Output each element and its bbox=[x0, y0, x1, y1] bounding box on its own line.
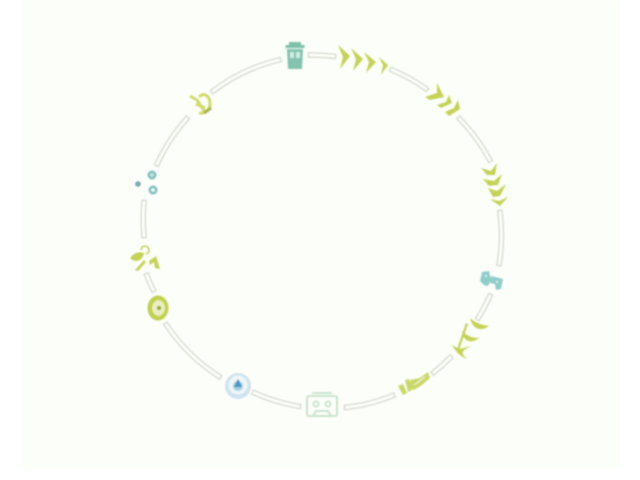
icon: chevrons down bbox=[481, 163, 508, 206]
icon: chevrons diagonal bbox=[425, 83, 460, 116]
icon: microscope bbox=[190, 95, 211, 113]
icon: teal machine bbox=[480, 271, 503, 290]
icon: leaf sprig bbox=[452, 318, 489, 359]
ring segments bbox=[143, 55, 501, 407]
icon: trash bin bbox=[286, 42, 304, 69]
icon: plant sprout bbox=[130, 246, 160, 271]
icon: fern leaf bbox=[398, 372, 430, 395]
icon: kiwi ring bbox=[148, 296, 168, 320]
icon: cassette tape bbox=[307, 393, 337, 416]
icon: teal bubbles bbox=[135, 172, 156, 193]
icon: water drop circle bbox=[225, 373, 251, 399]
icon: chevrons right bbox=[338, 45, 388, 75]
